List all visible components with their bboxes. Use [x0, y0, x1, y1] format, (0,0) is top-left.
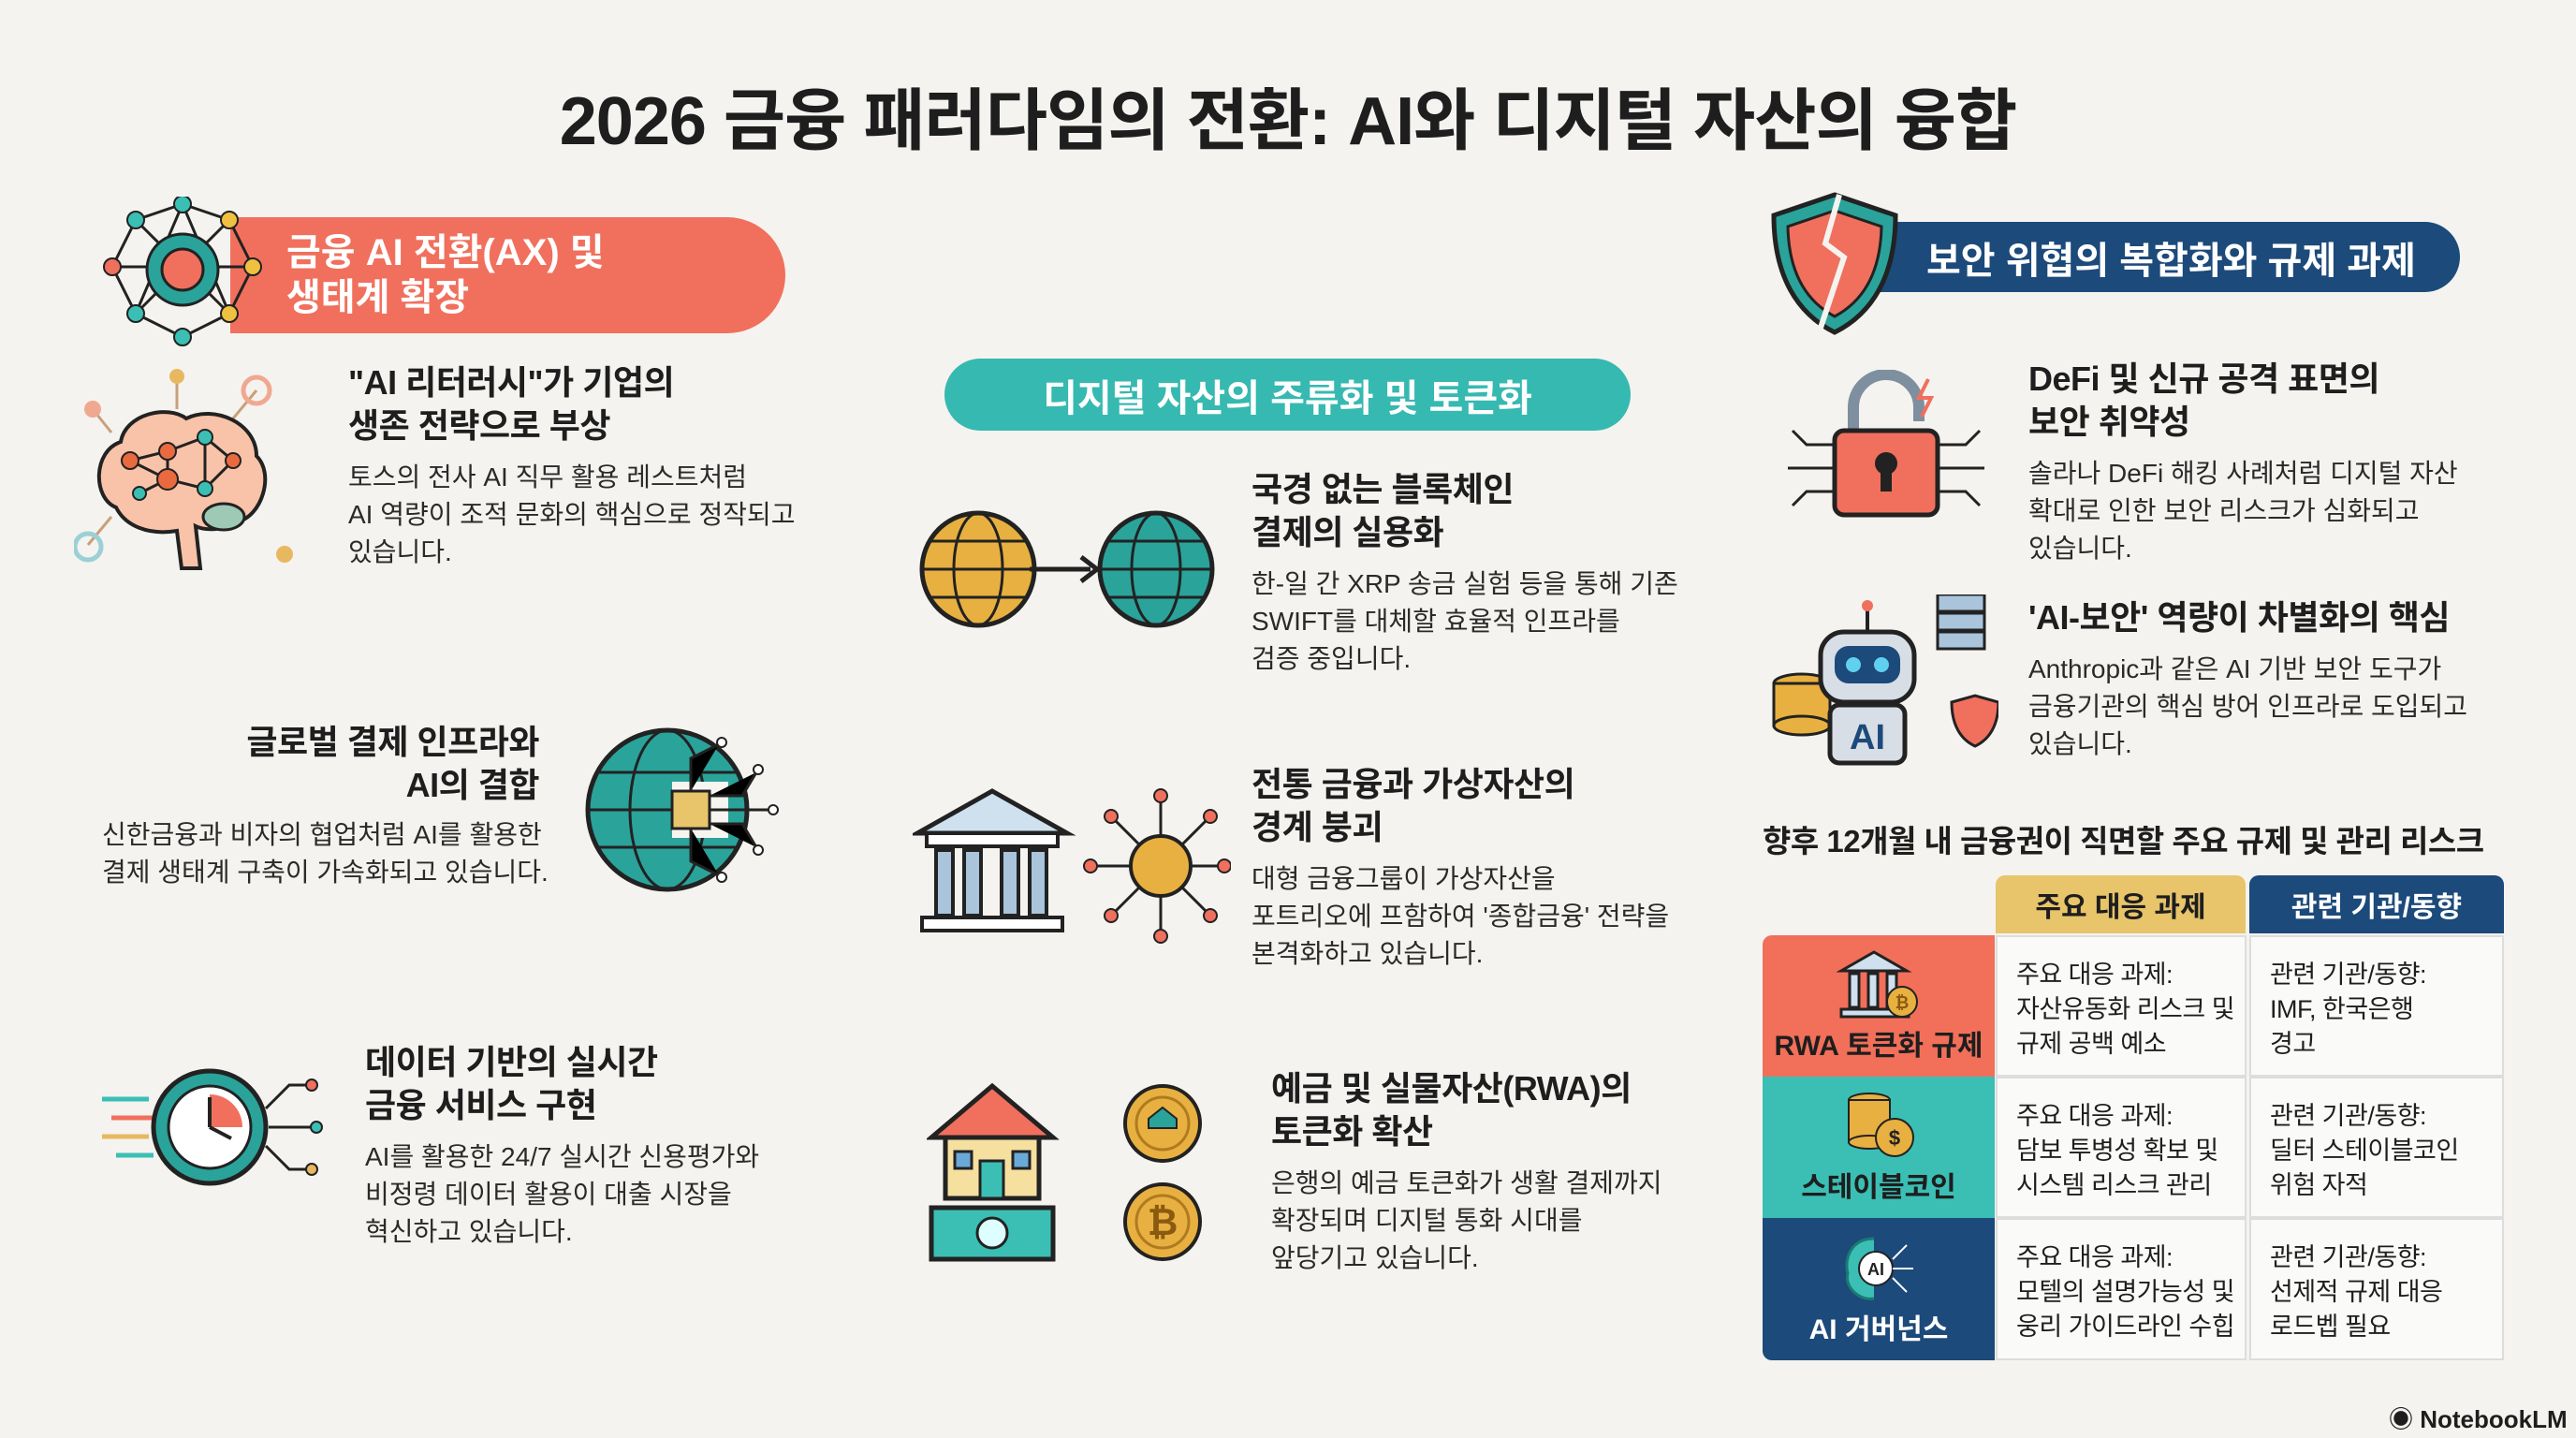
item: blockchain payments: 검증 중입니다. — [1251, 644, 1411, 673]
item: blockchain payments — [919, 470, 1678, 673]
icon: cracked shield — [1771, 192, 1898, 335]
item: traditional vs virtual: 경계 붕괴 — [1251, 808, 1383, 846]
table: regulation risks: 시스템 리스크 관리 — [2016, 1171, 2212, 1199]
icon: robot: AI — [1850, 718, 1885, 757]
icon: house, money, coins: ₿ — [1148, 1202, 1178, 1243]
header: tasks: 주요 대응 과제 — [2035, 892, 2206, 923]
heading + body: 토스의 전사 AI 직무 활용 레스트처럼 — [348, 462, 747, 492]
table title: 향후 12개월 내 금융권이 직면할 주요 규제 및 관리 리스크 — [1763, 824, 2484, 858]
item: DeFi — [1788, 360, 2458, 563]
table: regulation risks: 주요 대응 과제: — [2016, 961, 2173, 989]
table: regulation risks: 로드벱 필요 — [2270, 1313, 2391, 1341]
heading + body: AI 역량이 조적 문화의 핵심으로 정작되고 — [348, 500, 796, 529]
row: stablecoin — [1763, 1077, 1995, 1218]
table: regulation risks: 경고 — [2270, 1030, 2316, 1058]
item: global payments — [102, 723, 779, 891]
header pill: digital assets — [944, 359, 1631, 431]
text: 신한금융과 비자의 협업처럼 AI를 활용한 — [102, 820, 542, 849]
row: stablecoin: 스테이블코인 — [1801, 1172, 1956, 1203]
header pill: AI — [230, 217, 785, 333]
item: traditional vs virtual: 포트리오에 프함하여 '종합금융' 전략을 — [1251, 902, 1669, 931]
item: DeFi: 확대로 인한 보안 리스크가 심화되고 — [2028, 496, 2420, 525]
table: regulation risks: 담보 투병성 확보 및 — [2016, 1137, 2218, 1165]
heading + body — [348, 363, 796, 566]
icon: clock — [102, 1069, 323, 1185]
item: traditional vs virtual — [913, 765, 1669, 968]
item: traditional vs virtual: 전통 금융과 가상자산의 — [1251, 765, 1574, 803]
header: tasks — [1996, 875, 2246, 933]
item: RWA tokenization: 확장되며 디지털 통화 시대를 — [1271, 1206, 1582, 1235]
table: regulation risks: 관련 기관/동향: — [2270, 1243, 2426, 1271]
header: agencies: 관련 기관/동향 — [2291, 892, 2462, 923]
table: regulation risks: IMF, 한국은행 — [2270, 995, 2413, 1023]
text — [102, 723, 549, 887]
row: RWA — [1763, 935, 1995, 1077]
item: AI security: 'AI-보안' 역량이 차별화의 핵심 — [2028, 598, 2450, 637]
header pill: digital assets: 디지털 자산의 주류화 및 토큰화 — [1043, 378, 1532, 419]
item: AI security: Anthropic과 같은 AI 기반 보안 도구가 — [2028, 654, 2441, 683]
item: AI security: 있습니다. — [2028, 729, 2132, 758]
table: regulation risks: 모텔의 설명가능성 및 — [2016, 1278, 2234, 1306]
row: stablecoin: $ — [1889, 1126, 1900, 1150]
header pill: security — [1823, 222, 2460, 292]
table: regulation risks: 규제 공백 예소 — [2016, 1030, 2166, 1058]
item: traditional vs virtual: 본격화하고 있습니다. — [1251, 939, 1483, 968]
row: AI governance — [1763, 1218, 1995, 1360]
item: RWA tokenization: 은행의 예금 토큰화가 생활 결제까지 — [1271, 1168, 1662, 1197]
icon: robot — [1773, 594, 1998, 766]
icon: broken lock — [1788, 370, 1984, 517]
text: AI의 결합 — [406, 766, 539, 804]
heading + body: 있습니다. — [348, 537, 452, 566]
header: agencies — [2249, 875, 2504, 933]
table: regulation risks: 딜터 스테이블코인 — [2270, 1137, 2459, 1165]
item: RWA tokenization: 토큰화 확산 — [1271, 1112, 1433, 1151]
table: regulation risks: 선제적 규제 대응 — [2270, 1278, 2442, 1306]
row: RWA: ₿ — [1895, 993, 1909, 1012]
item: realtime data: 혁신하고 있습니다. — [365, 1217, 573, 1246]
row: AI governance: AI — [1867, 1260, 1884, 1279]
icon: house, money, coins — [927, 1082, 1202, 1262]
item: realtime data — [102, 1043, 759, 1246]
item: blockchain payments: 국경 없는 블록체인 — [1251, 470, 1514, 508]
item: blockchain payments: 결제의 실용화 — [1251, 513, 1443, 551]
heading + body: 생존 전략으로 부상 — [348, 406, 610, 445]
title: 2026 금융 패러다임의 전환: AI와 디지털 자산의 융합 — [560, 84, 2016, 159]
item: blockchain payments: SWIFT를 대체할 효율적 인프라를 — [1251, 607, 1620, 636]
row: RWA: RWA 토큰화 규제 — [1774, 1031, 1983, 1062]
item: AI security: 금융기관의 핵심 방어 인프라로 도입되고 — [2028, 692, 2467, 721]
table: regulation risks — [1763, 875, 2504, 1360]
item: AI literacy — [74, 363, 796, 570]
text: 글로벌 결제 인프라와 — [246, 723, 539, 761]
icon: brain — [74, 369, 293, 570]
panel: left AI transformation — [74, 197, 796, 1246]
header pill: security: 보안 위협의 복합화와 규제 과제 — [1926, 240, 2416, 281]
item: blockchain payments: 한-일 간 XRP 송금 실험 등을 통해 기존 — [1251, 569, 1678, 598]
icon: bank and network — [913, 788, 1231, 944]
item: traditional vs virtual: 대형 금융그룹이 가상자산을 — [1251, 864, 1556, 893]
table: regulation risks: 관련 기관/동향: — [2270, 1102, 2426, 1130]
header pill: AI: 생태계 확장 — [286, 277, 469, 318]
item: DeFi: DeFi 및 신규 공격 표면의 — [2028, 360, 2379, 398]
icon: network gear — [103, 197, 262, 346]
item: realtime data: 금융 서비스 구현 — [365, 1086, 596, 1124]
item: AI security — [1773, 594, 2467, 766]
table: regulation risks: 웅리 가이드라인 수힙 — [2016, 1313, 2234, 1341]
table: regulation risks: 자산유동화 리스크 및 — [2016, 995, 2234, 1023]
heading + body: "AI 리터러시"가 기업의 — [348, 363, 674, 402]
panel: right security and regulation — [1763, 192, 2504, 1360]
icon: two globes arrow — [919, 511, 1215, 627]
item: realtime data: 데이터 기반의 실시간 — [365, 1043, 658, 1081]
item: RWA tokenization: 앞당기고 있습니다. — [1271, 1243, 1479, 1272]
item: RWA tokenization — [927, 1069, 1662, 1272]
item: DeFi: 솔라나 DeFi 해킹 사례처럼 디지털 자산 — [2028, 459, 2458, 488]
logo: NotebookLM: ◉ NotebookLM — [2389, 1405, 2568, 1433]
panel: right security and regulation: 있습니다. — [2028, 534, 2132, 563]
panel: middle digital assets — [913, 359, 1678, 1272]
header pill: AI: 금융 AI 전환(AX) 및 — [286, 232, 605, 273]
text: 결제 생태계 구축이 가속화되고 있습니다. — [102, 858, 549, 887]
icon: globe circuit — [586, 728, 779, 891]
item: RWA tokenization: 예금 및 실물자산(RWA)의 — [1271, 1069, 1632, 1108]
table: regulation risks: 주요 대응 과제: — [2016, 1243, 2173, 1271]
item: realtime data: AI를 활용한 24/7 실시간 신용평가와 — [365, 1142, 759, 1171]
table: regulation risks: 관련 기관/동향: — [2270, 961, 2426, 989]
row: AI governance: AI 거버넌스 — [1809, 1314, 1948, 1345]
table: regulation risks: 위험 자적 — [2270, 1171, 2367, 1199]
item: realtime data: 비정령 데이터 활용이 대출 시장을 — [365, 1180, 732, 1209]
item: DeFi: 보안 취약성 — [2028, 403, 2190, 441]
table: regulation risks: 주요 대응 과제: — [2016, 1102, 2173, 1130]
